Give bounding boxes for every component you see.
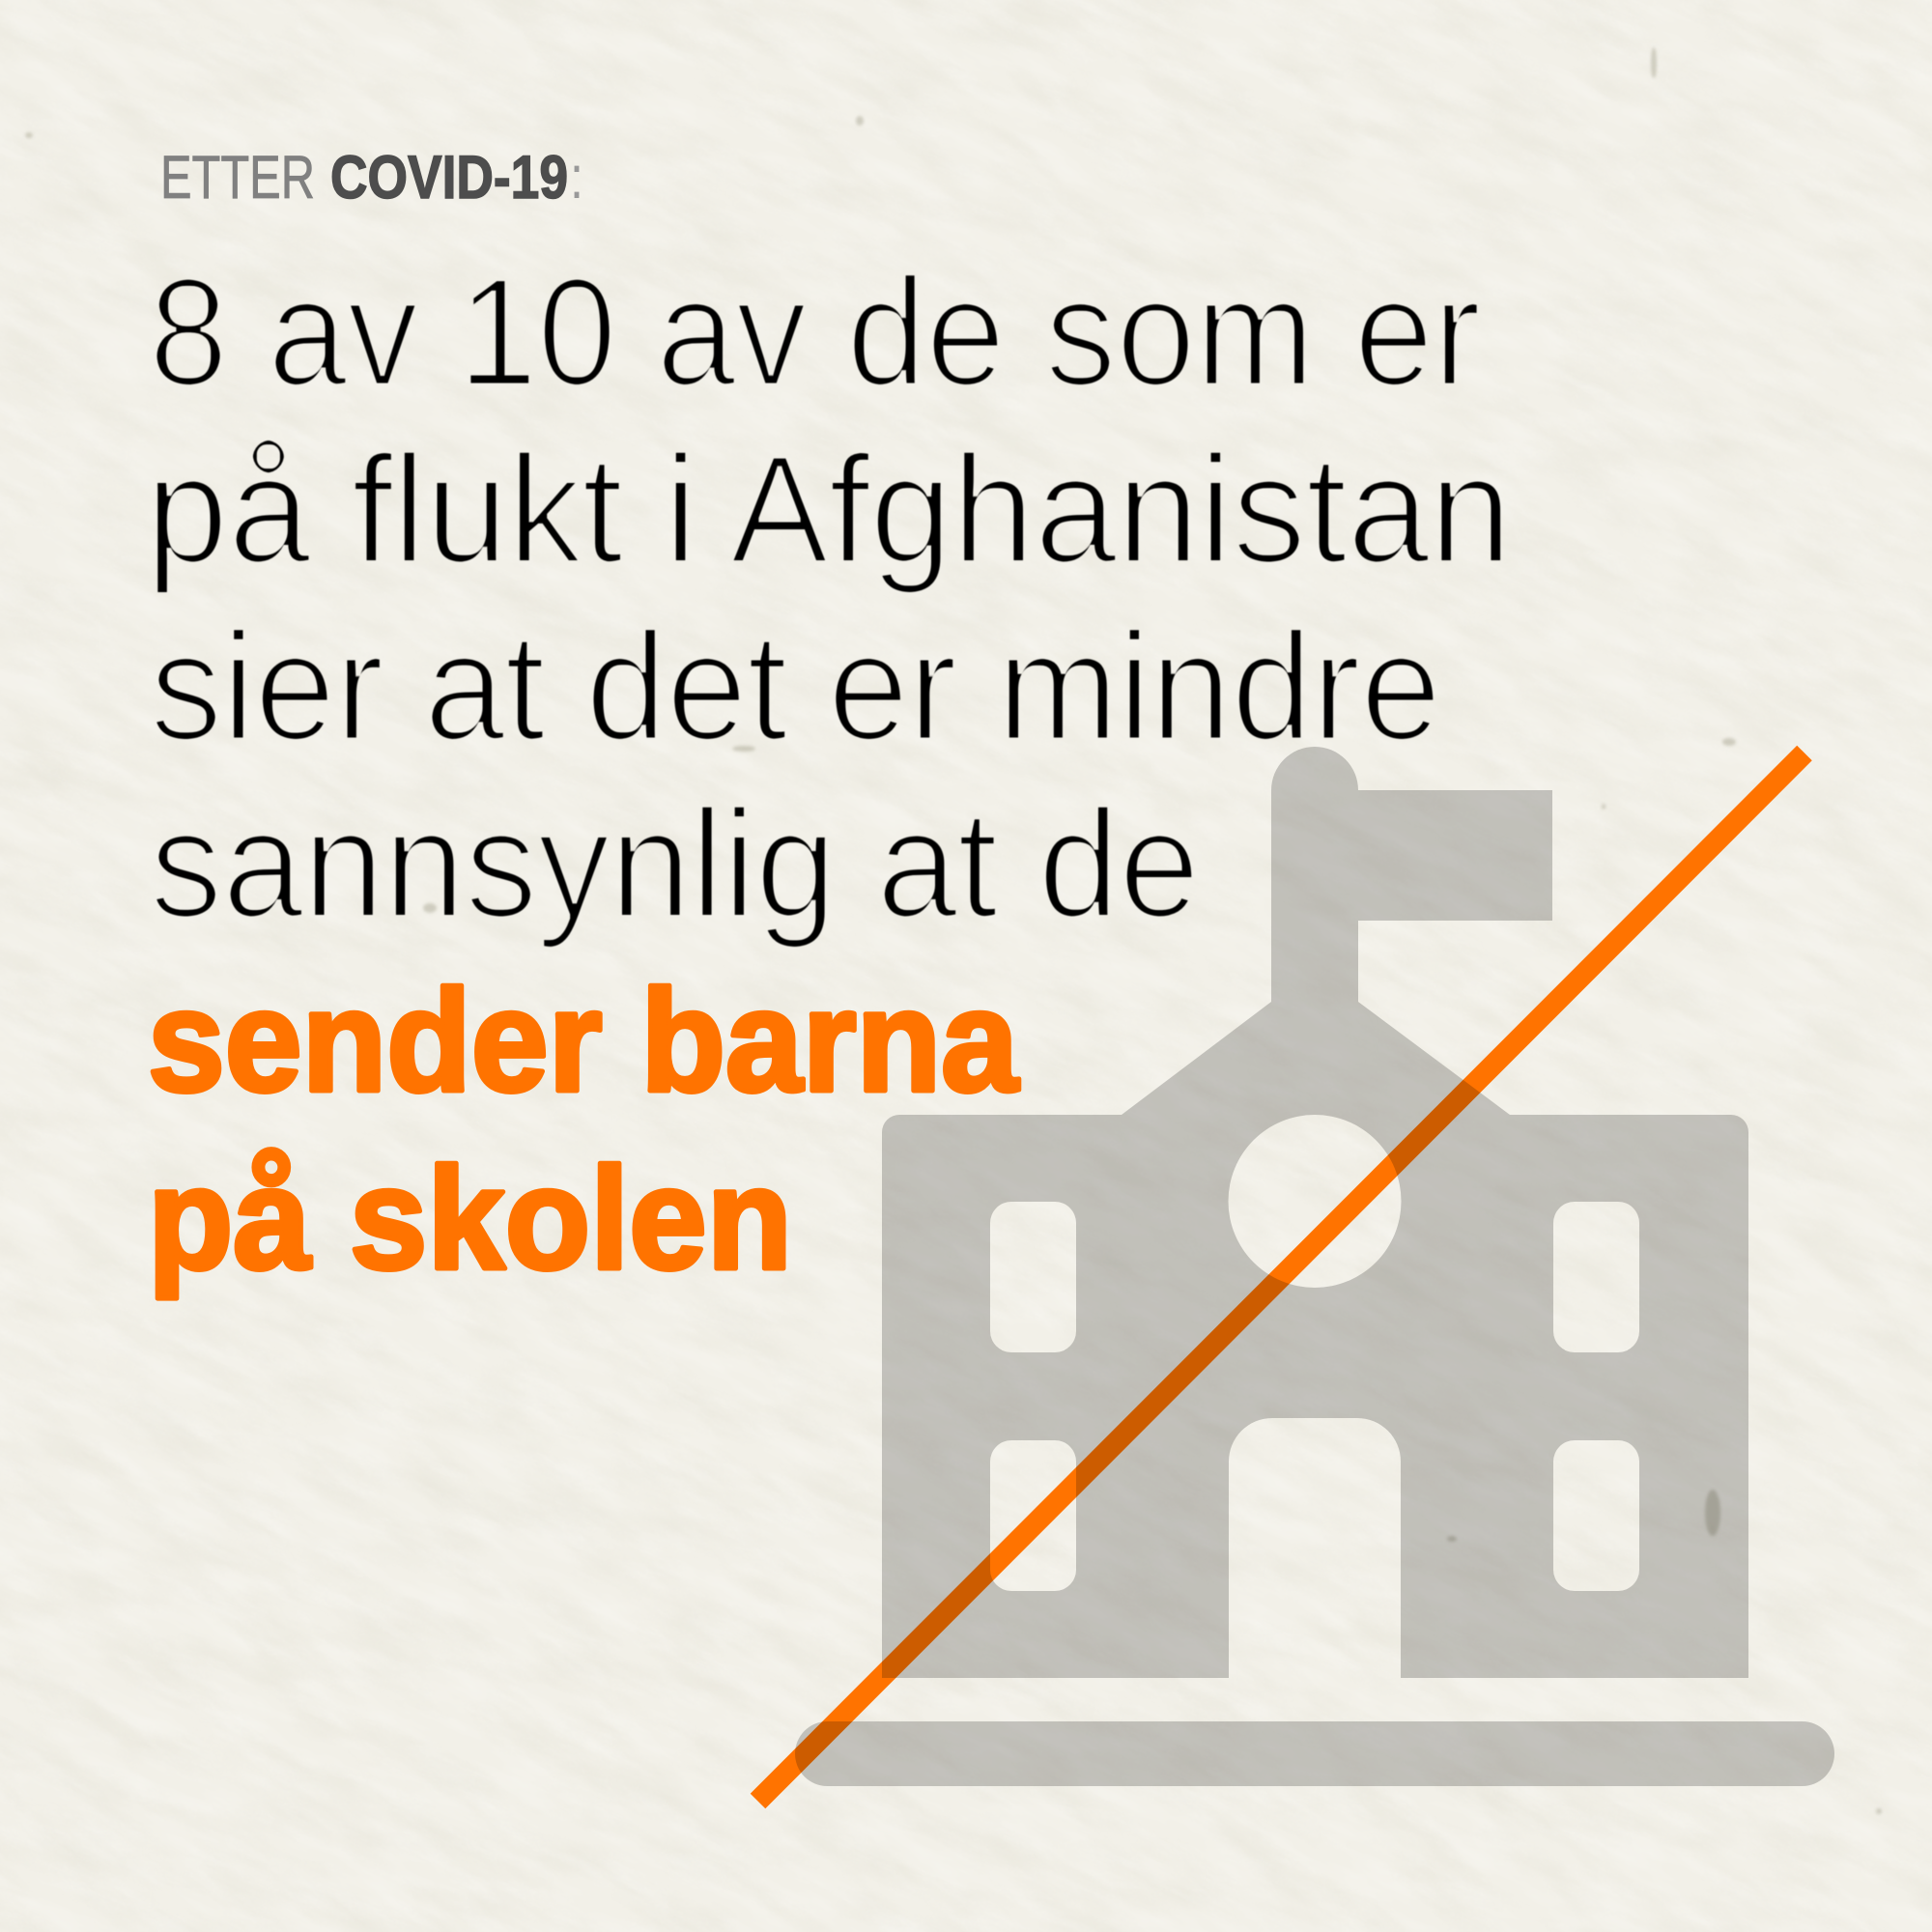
icon: school building with flag <box>795 747 1834 1786</box>
main statement text: sannsynlig at de <box>150 778 1200 950</box>
main statement text: 8 av 10 av de som er <box>149 245 1481 417</box>
eyebrow heading: COVID-19 <box>330 144 568 212</box>
highlighted orange statement: sender barna <box>148 959 1020 1122</box>
main statement text: på flukt i Afghanistan <box>146 423 1512 595</box>
eyebrow heading <box>160 144 583 212</box>
highlighted orange statement <box>148 959 1020 1299</box>
highlighted orange statement: på skolen <box>148 1137 792 1299</box>
icon: school building body, flag and openings <box>882 747 1748 1678</box>
diagonal strike-through line <box>757 753 1804 1801</box>
eyebrow heading: ETTER <box>160 144 315 212</box>
eyebrow heading: : <box>570 144 583 212</box>
main statement text: sier at det er mindre <box>150 601 1441 773</box>
main statement text <box>146 245 1512 950</box>
